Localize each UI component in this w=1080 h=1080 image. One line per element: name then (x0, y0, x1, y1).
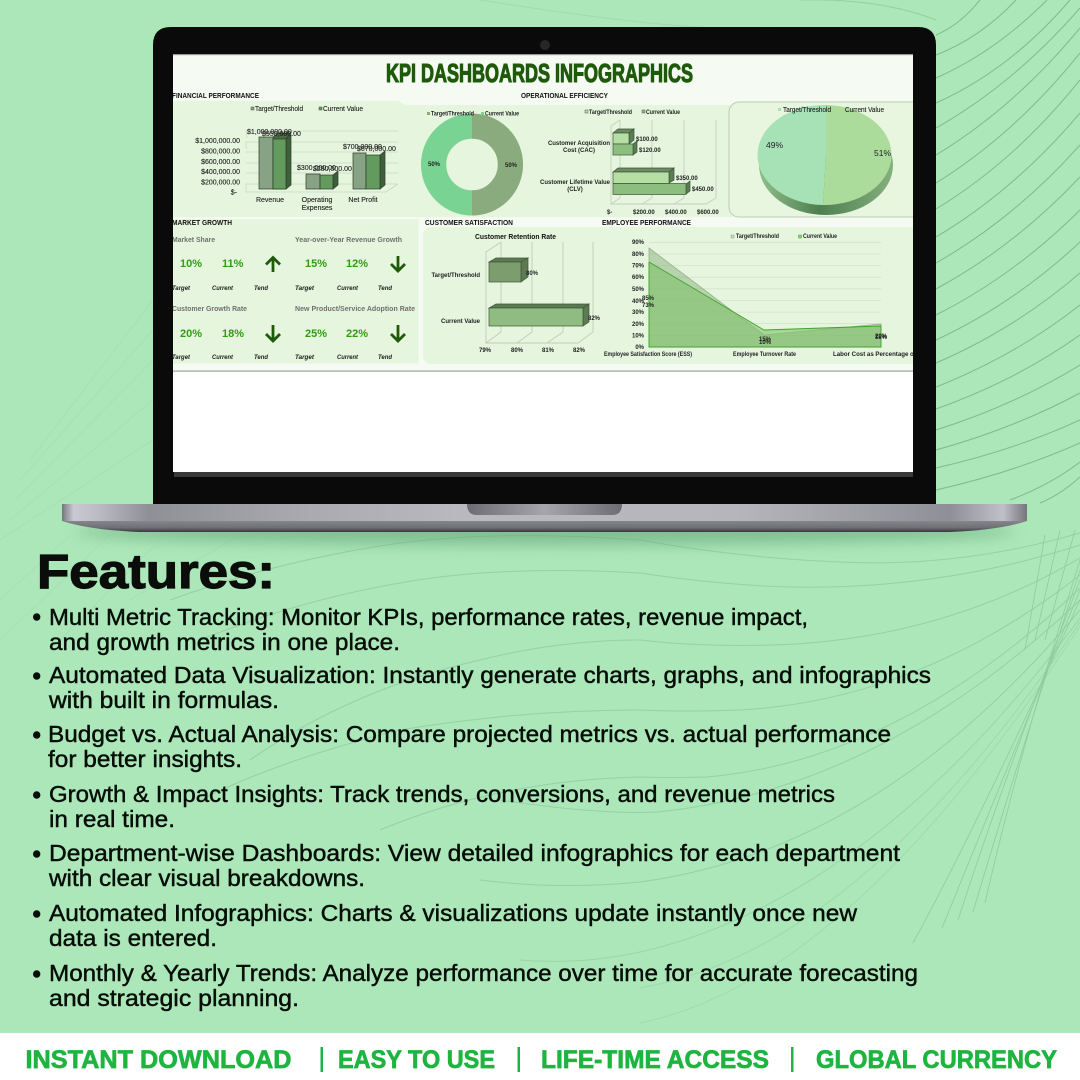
axis labels: $200.00 (633, 210, 655, 216)
pie slice: 49% (757, 105, 826, 205)
feature: automated infographics (33, 900, 858, 951)
bars (613, 129, 690, 194)
kpi: year-over-year revenue growth: Year-over-Year Revenue Growth (295, 237, 402, 244)
feature: multi metric tracking: Multi Metric Tracking: Monitor KPIs, performance rates, revenue impact, (49, 604, 808, 630)
value labels: 18% (875, 335, 888, 341)
value labels: $1,000,000.00 (247, 129, 292, 136)
legend (251, 106, 363, 113)
feature: growth and impact insights (33, 781, 835, 832)
legend (585, 110, 681, 116)
feature: multi metric tracking: and growth metrics in one place. (49, 629, 400, 655)
feature: monthly and yearly trends: and strategic planning. (49, 985, 299, 1011)
feature: growth and impact insights: in real time. (49, 806, 175, 832)
value labels: 20% (875, 334, 888, 340)
grid (246, 131, 398, 192)
feature: monthly and yearly trends: Monthly & Yearly Trends: Analyze performance over time for accurate forecasting (49, 960, 918, 986)
kpi: year-over-year revenue growth (295, 237, 405, 292)
category labels: Customer Acquisition (548, 141, 610, 147)
pie legend: Current Value (845, 107, 884, 114)
kpi: new product/service adoption rate (295, 306, 415, 361)
feature: automated data visualization: with built in formulas. (48, 687, 279, 713)
pie labels (766, 142, 891, 156)
axis labels: $800,000.00 (201, 148, 240, 156)
chart: employee performance area chart (604, 234, 944, 358)
axis labels (607, 210, 719, 216)
legend: Current Value (646, 110, 681, 116)
panel: market growth (172, 219, 418, 364)
kpi: customer growth rate: Tend (254, 354, 269, 361)
legend: Target/Threshold (736, 234, 779, 240)
kpi: market share: 10% (180, 258, 202, 270)
features heading: Features: (37, 546, 275, 599)
labels: 81% (542, 348, 555, 354)
legend: Target/Threshold (589, 110, 632, 116)
kpi: new product/service adoption rate: New Product/Service Adoption Rate (295, 306, 415, 313)
value labels (642, 296, 888, 346)
feature: automated data visualization (33, 662, 931, 713)
labels: 79% (479, 348, 492, 354)
feature: department-wise dashboards: with clear visual breakdowns. (48, 865, 365, 891)
labels: 80% (526, 271, 539, 277)
labels: Target/Threshold (431, 273, 480, 279)
kpi: new product/service adoption rate: Current (337, 354, 359, 361)
bars (259, 133, 385, 189)
kpi: market share: Target (172, 285, 191, 292)
labels: 82% (573, 348, 586, 354)
grid walls (486, 242, 593, 343)
kpi: customer growth rate: 18% (222, 328, 244, 340)
footer item: instant download: INSTANT DOWNLOAD (26, 1046, 292, 1074)
area: target (649, 248, 881, 347)
legend (731, 234, 838, 240)
category labels: Operating (302, 197, 332, 204)
kpi: customer growth rate: Target (172, 354, 191, 361)
value labels: $450.00 (692, 187, 714, 193)
y axis labels: 10% (632, 334, 645, 340)
pie side (759, 154, 893, 215)
legend: Target/Threshold (255, 106, 303, 113)
kpi: market share: Tend (254, 285, 269, 292)
notch (467, 504, 622, 515)
category labels (604, 352, 944, 358)
footer item: easy to use: EASY TO USE (338, 1046, 495, 1074)
axis labels: $- (231, 190, 238, 196)
kpi: customer growth rate: Customer Growth Rate (172, 306, 247, 313)
labels (431, 271, 601, 354)
features list (33, 604, 931, 1011)
value labels: 10% (759, 340, 772, 346)
y axis labels: 0% (635, 345, 645, 351)
value labels: $280,000.00 (313, 166, 352, 173)
feature: budget vs actual: for better insights. (48, 746, 242, 772)
screen (172, 54, 944, 477)
feature: monthly and yearly trends (33, 960, 918, 1011)
value labels: $350.00 (676, 176, 698, 182)
y axis labels: 30% (632, 310, 645, 316)
grid walls (611, 120, 716, 204)
category labels: Cost (CAC) (563, 148, 595, 154)
category labels: Employee Satisfaction Score (ESS) (604, 352, 692, 358)
donut chart: Current Value (485, 112, 520, 118)
heading: operational efficiency: OPERATIONAL EFFICIENCY (521, 93, 608, 100)
value labels (247, 129, 396, 173)
donut chart: 50% (428, 162, 441, 168)
axis labels: $200,000.00 (201, 180, 240, 186)
bars (489, 258, 589, 326)
legend: Current Value (803, 234, 838, 240)
category labels: Labor Cost as Percentage of Revenue (833, 352, 944, 358)
pie chart panel (729, 102, 929, 217)
kpi: new product/service adoption rate: Target (295, 354, 315, 361)
y axis labels: 50% (632, 287, 645, 293)
category labels: Employee Turnover Rate (733, 352, 797, 358)
kpi: customer growth rate (172, 306, 280, 361)
feature: automated infographics: data is entered. (49, 925, 217, 951)
heading: MARKET GROWTH (172, 220, 232, 227)
axis labels: $- (607, 210, 612, 216)
feature: automated data visualization: Automated Data Visualization: Instantly generate charts, graphs, and infographics (49, 662, 931, 688)
panel: operational efficiency (406, 105, 736, 217)
legend: Current Value (323, 106, 363, 113)
heading: financial performance: FINANCIAL PERFORMANCE (172, 93, 259, 100)
pie labels: 51% (874, 148, 891, 158)
category labels: Customer Lifetime Value (540, 180, 611, 186)
kpi: market share: 11% (222, 258, 244, 270)
value labels: 85% (642, 296, 655, 302)
kpi: customer growth rate: 20% (180, 328, 202, 340)
y axis labels: 40% (632, 299, 645, 305)
donut chart (427, 112, 520, 203)
axis labels: $1,000,000.00 (195, 138, 240, 145)
pie slice: 51% (823, 105, 892, 205)
footer item: global currency: GLOBAL CURRENCY (816, 1046, 1057, 1074)
axis labels (195, 138, 240, 196)
category labels (540, 141, 611, 193)
value labels: $950,000.00 (262, 131, 301, 138)
donut chart: Target/Threshold (431, 112, 474, 118)
chart: customer retention rate (431, 234, 601, 354)
kpi: year-over-year revenue growth: 15% (305, 258, 327, 270)
webcam (540, 40, 550, 50)
value labels: $670,000.00 (357, 146, 396, 153)
kpi: new product/service adoption rate: 22% (346, 328, 368, 340)
labels: 80% (511, 348, 524, 354)
kpi: year-over-year revenue growth: 12% (346, 258, 368, 270)
value labels: 73% (642, 303, 655, 309)
labels: Current Value (441, 319, 481, 325)
panel: financial performance bar chart (173, 101, 406, 217)
kpi: market share: Market Share (172, 237, 215, 244)
kpi: market share (172, 237, 280, 292)
y axis labels: 60% (632, 275, 645, 281)
kpi: new product/service adoption rate: 25% (305, 328, 327, 340)
feature: growth and impact insights: Growth & Impact Insights: Track trends, conversions, and revenue metrics (49, 781, 835, 807)
horizontal bar chart: customer value (540, 110, 719, 216)
pie labels: 49% (766, 140, 783, 150)
footer banner (0, 1033, 1080, 1080)
value labels: $700,000.00 (343, 144, 382, 151)
feature: department-wise dashboards: Department-wise Dashboards: View detailed infographics for each department (49, 840, 900, 866)
category labels: (CLV) (567, 187, 583, 193)
pie legend (778, 107, 884, 114)
axis labels: $400.00 (665, 210, 687, 216)
laptop (62, 27, 1027, 532)
value labels: $300,000.00 (297, 165, 336, 172)
category labels: Net Profit (348, 197, 378, 204)
y axis labels: 90% (632, 240, 645, 246)
heading: customer satisfaction: CUSTOMER SATISFACTION (425, 220, 513, 227)
feature: multi metric tracking (33, 604, 808, 655)
feature: budget vs actual: Budget vs. Actual Analysis: Compare projected metrics vs. actual performance (48, 721, 891, 747)
panel: customer satisfaction and employee performance background (423, 227, 923, 364)
footer item: life-time access: LIFE-TIME ACCESS (541, 1046, 769, 1074)
feature: budget vs actual (33, 721, 891, 772)
feature: automated infographics: Automated Infographics: Charts & visualizations update instantly once new (49, 900, 858, 926)
feature: department-wise dashboards (33, 840, 900, 891)
kpi: year-over-year revenue growth: Tend (378, 285, 393, 292)
y axis labels: 80% (632, 252, 645, 258)
kpi: customer growth rate: Current (212, 354, 234, 361)
value labels: 15% (759, 337, 772, 343)
axis labels: $600,000.00 (201, 159, 240, 166)
value labels (636, 137, 714, 193)
category labels (256, 197, 378, 212)
value labels: $120.00 (639, 148, 661, 154)
kpi: year-over-year revenue growth: Current (337, 285, 359, 292)
area: current (649, 262, 881, 347)
y axis labels: 20% (632, 322, 645, 328)
pie legend: Target/Threshold (783, 107, 831, 114)
category labels: Revenue (256, 197, 284, 204)
kpi: year-over-year revenue growth: Target (295, 285, 315, 292)
donut chart: 50% (505, 163, 518, 169)
labels: 82% (588, 316, 601, 322)
chart: customer retention rate: Customer Retention Rate (475, 234, 556, 241)
kpi: new product/service adoption rate: Tend (378, 354, 393, 361)
category labels: Expenses (302, 205, 333, 212)
laptop base (62, 504, 1027, 532)
grid (649, 242, 881, 335)
laptop shadow (75, 519, 1015, 545)
laptop lid (153, 27, 936, 504)
axis labels: $600.00 (697, 210, 719, 216)
dashboard title: KPI DASHBOARDS INFOGRAPHICS (386, 60, 693, 88)
value labels: $100.00 (636, 137, 658, 143)
axis labels: $400,000.00 (201, 169, 240, 176)
y axis labels (632, 240, 645, 351)
y axis labels: 70% (632, 264, 645, 270)
kpi: market share: Current (212, 285, 234, 292)
heading: employee performance: EMPLOYEE PERFORMANCE (602, 220, 691, 227)
